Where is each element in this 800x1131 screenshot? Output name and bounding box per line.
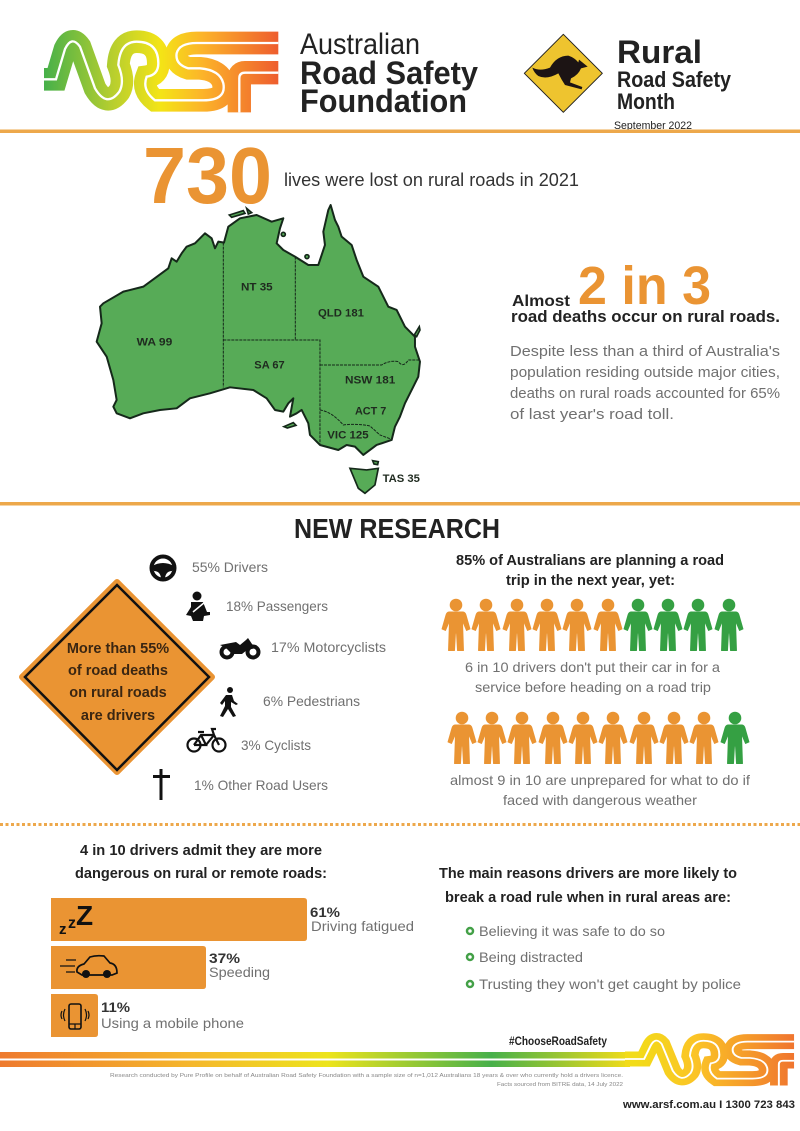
bar: driving fatigued: z bbox=[68, 915, 76, 932]
heading: Rural Road Safety Month: September 2022 bbox=[614, 120, 692, 132]
heading: Australian Road Safety Foundation bbox=[300, 28, 478, 119]
bar: driving fatigued: Z bbox=[76, 900, 93, 931]
heading: Rural Road Safety Month: Month bbox=[617, 89, 675, 114]
heading: Rural Road Safety Month: Rural bbox=[617, 34, 702, 70]
bar: mobile phone bbox=[51, 994, 244, 1037]
text: almost 9 in 10: almost 9 in 10 are unprepared for what to do if bbox=[450, 772, 750, 788]
callout: 2 in 3: Almost bbox=[512, 293, 571, 310]
bar: mobile phone: 11% bbox=[101, 999, 131, 1015]
footnote: Research conducted by Pure Profile on behalf of Australian Road Safety Foundation with a sample size of n=1,012 Australians 18 years & over who currently hold a drivers licence. bbox=[110, 1073, 624, 1079]
text block: population explanation: deaths on rural roads accounted for 65% bbox=[510, 385, 780, 402]
heading: 4 in 10 drivers bbox=[75, 843, 327, 882]
diamond sign: more than 55%: are drivers bbox=[81, 708, 155, 724]
heading: 85% planning a road trip bbox=[456, 553, 724, 589]
bar: driving fatigued: Driving fatigued bbox=[311, 918, 414, 934]
diamond sign: more than 55%: of road deaths bbox=[68, 663, 168, 679]
icon: motorcycle bbox=[220, 638, 258, 658]
map: state labels: SA 67 bbox=[254, 360, 285, 372]
label: cyclists: 3% Cyclists bbox=[241, 737, 311, 753]
text: almost 9 in 10 bbox=[450, 772, 750, 808]
label: motorcyclists: 17% Motorcyclists bbox=[271, 639, 386, 655]
pictogram: 6 in 10 bbox=[442, 599, 743, 650]
heading: Rural Road Safety Month: Road Safety bbox=[617, 67, 732, 92]
heading: 85% planning a road trip: 85% of Australians are planning a road bbox=[456, 553, 724, 569]
label: drivers: 55% Drivers bbox=[192, 559, 268, 575]
callout: 2 in 3 bbox=[511, 256, 780, 326]
footer gradient band bbox=[0, 1052, 630, 1067]
map: state labels: NT 35 bbox=[241, 282, 273, 294]
map: Australia road deaths by state bbox=[97, 205, 420, 493]
icon: steering wheel bbox=[152, 556, 174, 580]
icon: cross bbox=[153, 769, 170, 800]
map: state labels: QLD 181 bbox=[318, 308, 364, 320]
headline: 730 lives lost bbox=[143, 131, 579, 220]
headline: 730 lives lost: lives were lost on rural roads in 2021 bbox=[284, 170, 579, 190]
text: 6 in 10 drivers: service before heading on a road trip bbox=[475, 679, 711, 695]
text: almost 9 in 10: faced with dangerous weather bbox=[503, 792, 697, 808]
icon: bicycle bbox=[188, 729, 226, 752]
heading: new research: NEW RESEARCH bbox=[294, 513, 500, 544]
diamond sign: more than 55%: on rural roads bbox=[69, 685, 167, 701]
label: pedestrians: 6% Pedestrians bbox=[263, 693, 360, 709]
map: state labels: VIC 125 bbox=[327, 430, 369, 442]
map: state borders bbox=[223, 243, 419, 445]
map: state labels bbox=[137, 282, 420, 485]
text: 6 in 10 drivers bbox=[465, 659, 720, 695]
text: 6 in 10 drivers: 6 in 10 drivers don't put their car in for a bbox=[465, 659, 720, 675]
bar chart: risky behaviours bbox=[51, 898, 414, 1037]
list: reasons bbox=[467, 923, 741, 992]
text block: population explanation: of last year's road toll. bbox=[510, 406, 674, 423]
label: other road users: 1% Other Road Users bbox=[194, 777, 328, 793]
list: reasons: Being distracted bbox=[479, 949, 583, 965]
bar: driving fatigued: z bbox=[59, 921, 66, 938]
icon: kangaroo sign bbox=[524, 34, 602, 112]
map: state labels: ACT 7 bbox=[355, 405, 386, 417]
headline: 730 lives lost: 730 bbox=[143, 131, 272, 220]
heading: Australian Road Safety Foundation: Road Safety bbox=[300, 55, 478, 91]
bar: mobile phone: Using a mobile phone bbox=[101, 1015, 244, 1031]
heading: main reasons bbox=[439, 866, 737, 906]
diamond sign: more than 55% bbox=[22, 582, 212, 772]
map: islands bbox=[229, 208, 420, 493]
text block: population explanation bbox=[510, 343, 780, 423]
bar: speeding bbox=[51, 946, 270, 989]
heading: 4 in 10 drivers: 4 in 10 drivers admit they are more bbox=[80, 843, 322, 859]
bar: driving fatigued: 61% bbox=[310, 904, 341, 920]
footnote bbox=[110, 1073, 624, 1088]
list: reasons: Believing it was safe to do so bbox=[479, 923, 665, 939]
heading: Australian Road Safety Foundation: Australian bbox=[300, 28, 420, 61]
map: state labels: NSW 181 bbox=[345, 375, 395, 387]
heading: 85% planning a road trip: trip in the next year, yet: bbox=[506, 573, 675, 589]
hashtag: #ChooseRoadSafety bbox=[509, 1034, 607, 1048]
heading: main reasons: The main reasons drivers are more likely to bbox=[439, 866, 737, 882]
bar: speeding: 37% bbox=[209, 950, 241, 966]
logo: ARSF header bbox=[44, 41, 278, 112]
heading: 4 in 10 drivers: dangerous on rural or remote roads: bbox=[75, 866, 327, 882]
heading: main reasons: break a road rule when in rural areas are: bbox=[445, 890, 731, 906]
pictogram: 9 in 10 bbox=[448, 712, 749, 764]
logo: ARSF footer bbox=[625, 1041, 794, 1085]
icon: seatbelt passenger bbox=[186, 592, 210, 621]
label: passengers: 18% Passengers bbox=[226, 598, 328, 614]
footnote: Facts sourced from BITRE data, 14 July 2022 bbox=[497, 1082, 623, 1088]
icon: pedestrian bbox=[220, 687, 238, 717]
contact details: www.arsf.com.au I 1300 723 843 bbox=[622, 1099, 795, 1111]
text block: population explanation: population residing outside major cities, bbox=[510, 364, 780, 381]
diamond sign: more than 55%: More than 55% bbox=[67, 641, 169, 657]
map: state labels: WA 99 bbox=[137, 337, 172, 349]
bar: speeding: Speeding bbox=[209, 964, 270, 980]
callout: 2 in 3: road deaths occur on rural roads. bbox=[511, 307, 780, 326]
bar: driving fatigued bbox=[51, 898, 414, 941]
heading: Rural Road Safety Month bbox=[614, 34, 732, 132]
map: state labels: TAS 35 bbox=[383, 473, 420, 485]
callout: 2 in 3: 2 in 3 bbox=[578, 256, 711, 316]
heading: Australian Road Safety Foundation: Foundation bbox=[300, 83, 467, 119]
text block: population explanation: Despite less than a third of Australia's bbox=[510, 343, 780, 360]
list: reasons: Trusting they won't get caught by police bbox=[479, 976, 741, 992]
